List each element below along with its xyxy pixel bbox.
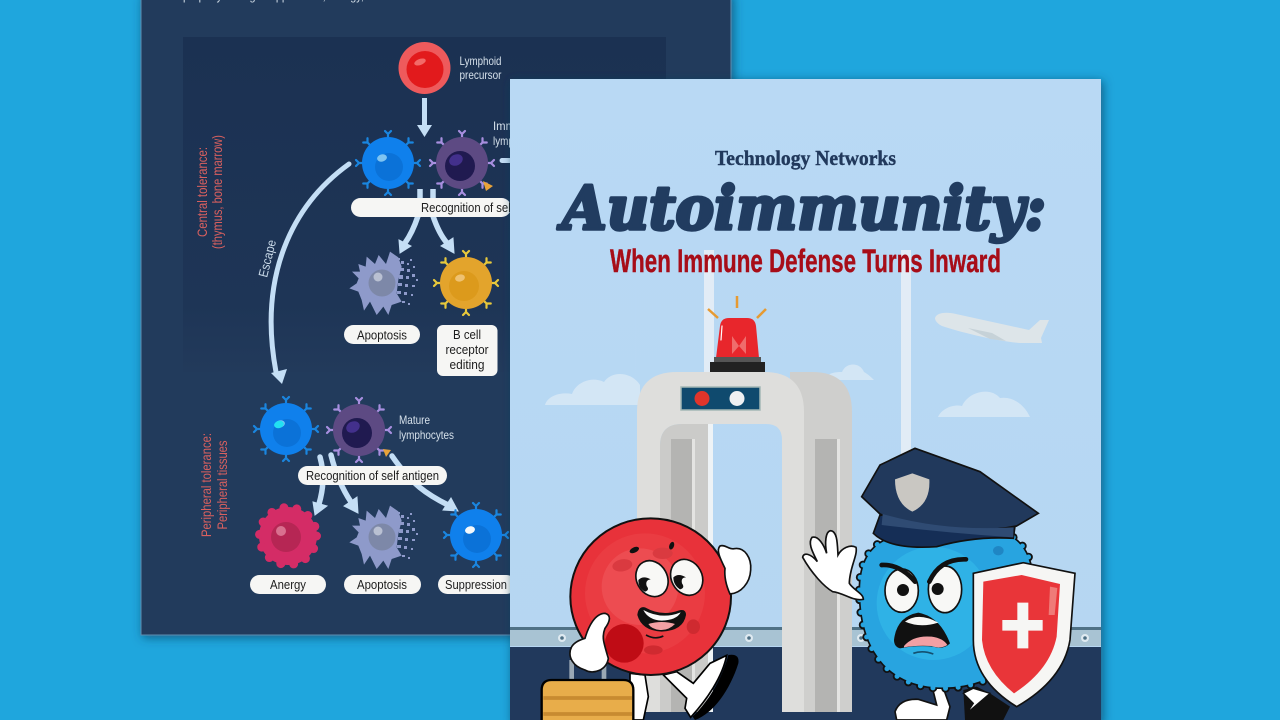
arrows: central recognition outcomes (399, 189, 454, 253)
hand: pointing on body (570, 613, 609, 672)
arrows: peripheral recognition outcomes (313, 455, 458, 515)
cell: apoptosis, central (349, 252, 418, 315)
label: peripheral tolerance: Peripheral tissues (214, 440, 230, 530)
label: escape: Escape (255, 238, 279, 279)
mouth (894, 613, 950, 654)
label: peripheral tolerance (198, 433, 230, 537)
label: lymphoid precursor: Lymphoid (460, 54, 502, 68)
cell: anergy (259, 507, 317, 565)
legs and shoes (895, 683, 1010, 720)
diagram background panel (183, 37, 666, 372)
pill: apoptosis, central: Apoptosis (357, 328, 407, 342)
eyes and brows (882, 559, 966, 613)
arrow: precursor to immature cells (417, 98, 432, 137)
label: mature lymphocytes: lymphocytes (399, 428, 454, 442)
cell: suppression (444, 503, 508, 567)
arrow: escape (271, 164, 349, 384)
label: peripheral tolerance: Peripheral tolerance: (198, 433, 214, 537)
legs and shoe (630, 655, 739, 720)
pill: recognition of self antigen, central (351, 198, 554, 217)
cell: mature purple lymphocyte (327, 398, 391, 462)
suitcase (542, 680, 633, 720)
cloud small (822, 364, 874, 380)
cell: mature blue lymphocyte (254, 397, 318, 461)
box: B cell receptor editing (437, 325, 498, 376)
shield (973, 563, 1075, 707)
label: mature lymphocytes (399, 413, 454, 442)
label: lymphoid precursor (460, 54, 502, 82)
floor rail (510, 627, 1101, 646)
label: mature lymphocytes: Mature (399, 413, 430, 427)
pill: anergy (250, 575, 326, 594)
label: central tolerance (194, 135, 225, 249)
arrow: immature cells to the right (502, 158, 540, 163)
cell: apoptosis, peripheral (349, 506, 418, 569)
body (859, 532, 1033, 688)
hand: waving (803, 531, 863, 600)
cloud left (545, 374, 640, 405)
floor (510, 647, 1101, 720)
mouth (637, 607, 686, 638)
suitcase handle (572, 660, 604, 682)
pill: recognition of self antigen, peripheral: Recognition of self antigen (306, 468, 439, 483)
hand: fist (718, 546, 751, 594)
icon: airplane (935, 313, 1049, 343)
label: immature lymphocytes: Immature (493, 119, 541, 133)
eyes (629, 541, 709, 602)
brand: Technology Networks: Technology Networks (715, 146, 896, 170)
icon: siren (708, 296, 766, 372)
box: B cell receptor editing: receptor (446, 342, 489, 357)
character: red blood cell with suitcase (542, 518, 751, 720)
gate display (681, 387, 760, 410)
hat (862, 448, 1038, 547)
label: central tolerance: (thymus, bone marrow) (209, 135, 225, 249)
cell: immature purple lymphocyte (430, 131, 494, 195)
cell: lymphoid precursor (398, 42, 450, 94)
label: lymphoid precursor: precursor (460, 68, 502, 82)
character: blue immune cell police officer (803, 448, 1075, 720)
panel: back poster, tolerance diagram (141, 0, 731, 635)
security gate (637, 372, 852, 712)
box: B cell receptor editing: editing (450, 357, 484, 372)
pill: recognition of self antigen, central: Recognition of self antigen (421, 200, 554, 215)
panel: front poster cover (510, 79, 1101, 720)
label: immature lymphocytes: lymphocytes (493, 134, 548, 148)
cell: immature blue lymphocyte (356, 131, 420, 195)
body (570, 518, 731, 675)
cell: B cell receptor editing (434, 251, 498, 315)
cloud right (938, 392, 1030, 417)
pill: apoptosis, central (344, 325, 420, 344)
title: Autoimmunity: (557, 174, 1046, 244)
pill: apoptosis, peripheral (344, 575, 421, 594)
box: B cell receptor editing: B cell (453, 327, 481, 342)
background poles (704, 250, 911, 460)
label: central tolerance: Central tolerance: (194, 147, 210, 237)
pill: apoptosis, peripheral: Apoptosis (357, 577, 407, 592)
label: immature lymphocytes (493, 119, 548, 148)
pill: anergy: Anergy (270, 577, 306, 592)
pill: suppression: Suppression (445, 577, 507, 592)
subtitle: When Immune Defense Turns Inward (610, 243, 1001, 279)
